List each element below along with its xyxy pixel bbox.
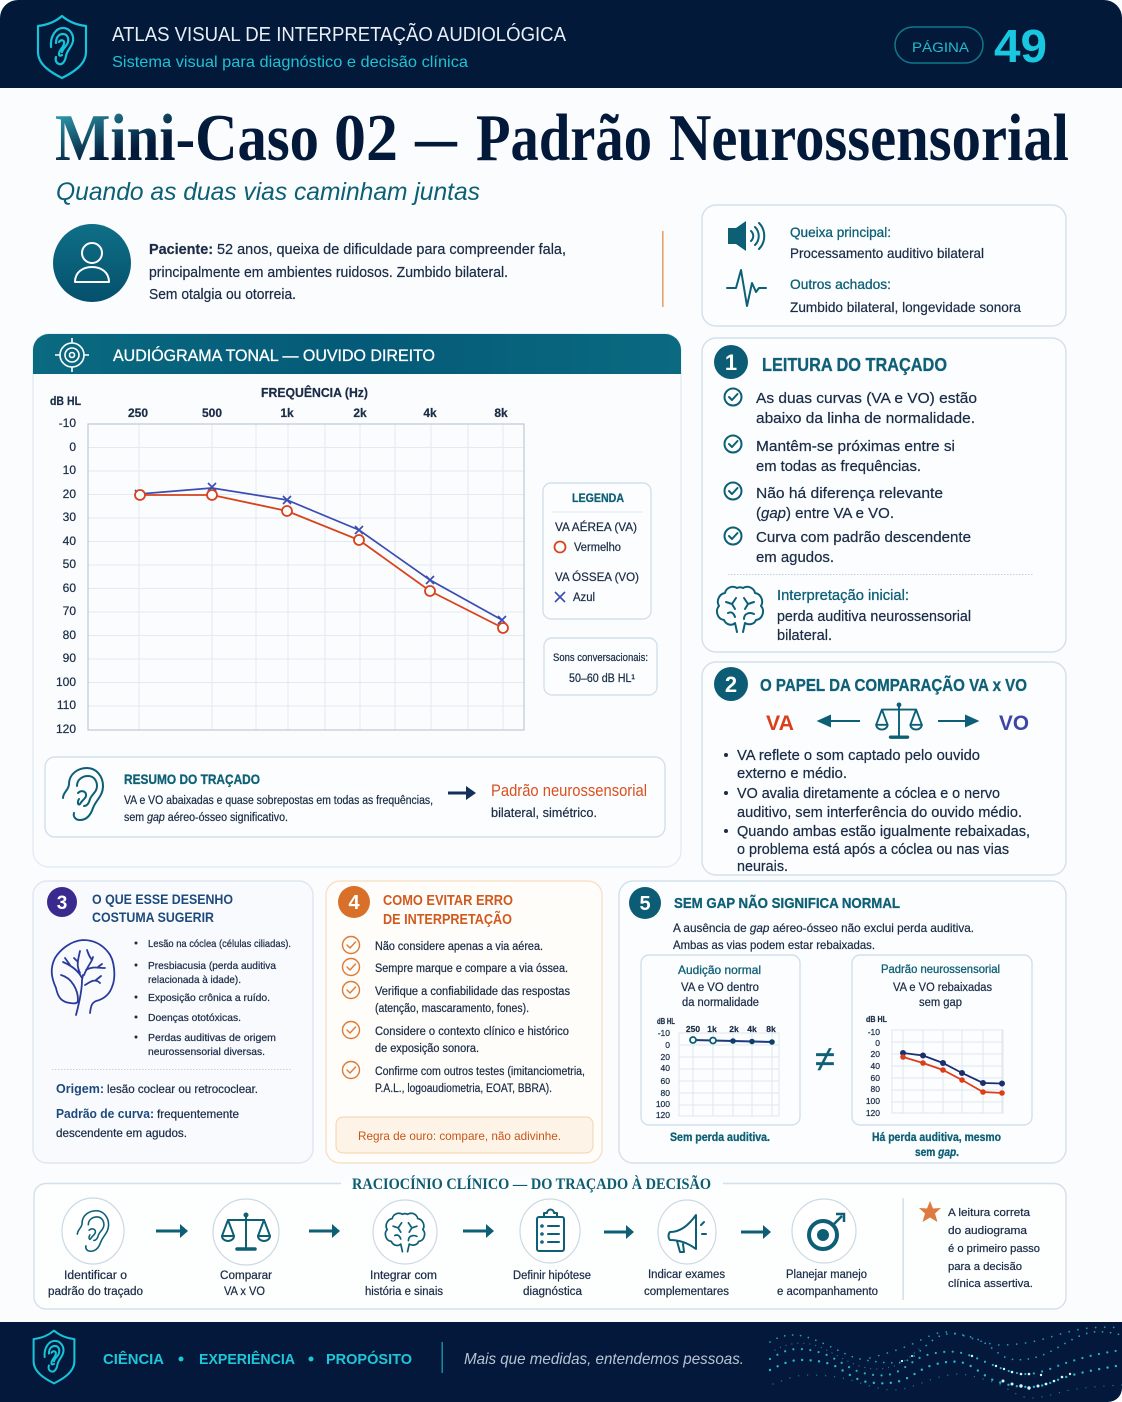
badge 5: 5 bbox=[639, 893, 651, 915]
heading: COSTUMA SUGERIR bbox=[92, 909, 214, 925]
legend: VA ÓSSEA (VO) bbox=[555, 569, 639, 584]
mini chart: sensorineural pattern: 120 bbox=[866, 1108, 880, 1118]
legend: LEGENDA bbox=[572, 491, 624, 505]
heading: COMO EVITAR ERRO bbox=[383, 893, 513, 909]
checklist bbox=[342, 936, 585, 1095]
step 2: Comparar bbox=[220, 1270, 272, 1282]
bright wave highlights bbox=[901, 1355, 1071, 1390]
checklist: abaixo da linha de normalidade. bbox=[756, 410, 975, 427]
icon: ear shield logo bbox=[38, 16, 86, 78]
callout: correct reading: do audiograma bbox=[948, 1225, 1028, 1237]
badge 2 bbox=[714, 667, 748, 701]
mini chart: sensorineural pattern: 80 bbox=[871, 1084, 880, 1094]
arrow bbox=[448, 786, 476, 800]
mini chart: normal hearing: -10 bbox=[658, 1028, 670, 1038]
badge 3: 3 bbox=[57, 893, 67, 914]
icon: star bbox=[919, 1201, 941, 1222]
bullets: VO avalia diretamente a cóclea e o nervo bbox=[737, 786, 1000, 802]
bullets: Lesão na cóclea (células ciliadas). bbox=[148, 938, 291, 950]
chart captions bbox=[670, 1132, 1001, 1159]
trace summary: sem gap aéreo-ósseo significativo. bbox=[124, 812, 288, 824]
VA to VO diagram: VA bbox=[766, 712, 794, 735]
badge 2: 2 bbox=[725, 672, 737, 697]
mini chart: normal hearing: 60 bbox=[661, 1076, 670, 1086]
step 3 bbox=[365, 1200, 443, 1298]
chart: audiogram: 250 bbox=[128, 406, 148, 420]
chart: audiogram: 60 bbox=[63, 581, 76, 595]
mini chart: sensorineural pattern: 20 bbox=[871, 1049, 880, 1059]
bullets: o problema está após a cóclea ou nas vias bbox=[737, 842, 1009, 858]
badge 3 bbox=[47, 887, 77, 917]
step 4: diagnóstica bbox=[523, 1286, 583, 1298]
bullets: Perdas auditivas de origem bbox=[148, 1032, 276, 1044]
step 1: Identificar o bbox=[64, 1270, 127, 1282]
footer values: CIÊNCIA bbox=[103, 1350, 164, 1368]
bullets: Quando ambas estão igualmente rebaixadas, bbox=[737, 824, 1030, 840]
title: — bbox=[414, 101, 458, 175]
chart captions: Sem perda auditiva. bbox=[670, 1132, 770, 1144]
step 6: e acompanhamento bbox=[777, 1286, 878, 1298]
complaint text: Zumbido bilateral, longevidade sonora bbox=[790, 299, 1021, 315]
VA to VO diagram bbox=[766, 703, 1029, 737]
mini chart: normal hearing: 2k bbox=[729, 1024, 739, 1034]
legend: Vermelho bbox=[574, 542, 621, 554]
dotted wave decoration bbox=[770, 1327, 1122, 1398]
initial interpretation: bilateral. bbox=[777, 628, 832, 644]
not equal sign: ≠ bbox=[815, 1038, 835, 1079]
panel 5: no gap does not mean normal bbox=[619, 881, 1066, 1163]
patient text: Sem otalgia ou otorreia. bbox=[149, 286, 296, 303]
complaint text bbox=[790, 224, 1021, 315]
bullets: VA reflete o som captado pelo ouvido bbox=[737, 748, 980, 764]
bullets bbox=[134, 938, 291, 1058]
icon: footer shield logo bbox=[34, 1331, 74, 1383]
series: bone conduction (blue) bbox=[135, 483, 506, 624]
mini chart: normal hearing: 8k bbox=[766, 1024, 776, 1034]
complaint text: Processamento auditivo bilateral bbox=[790, 245, 984, 261]
step 3: história e sinais bbox=[365, 1286, 443, 1298]
checklist: Curva com padrão descendente bbox=[756, 529, 971, 546]
bullets: relacionada à idade). bbox=[148, 974, 241, 986]
mini chart: normal hearing: 0 bbox=[665, 1040, 670, 1050]
bullets: externo e médio. bbox=[737, 766, 847, 782]
icon: brain tree bbox=[52, 940, 114, 1015]
checklist: Confirme com outros testes (imitanciometria, bbox=[375, 1066, 585, 1078]
mini chart: sensorineural pattern: Padrão neurossensorial bbox=[881, 962, 1000, 976]
heading: SEM GAP NÃO SIGNIFICA NORMAL bbox=[674, 894, 900, 912]
checklist: em todas as frequências. bbox=[756, 458, 921, 475]
mini chart: normal hearing: Audição normal bbox=[678, 963, 761, 977]
arrow head bbox=[180, 1224, 188, 1238]
origin and curve notes: lesão coclear ou retrococlear. bbox=[107, 1082, 258, 1096]
callout: correct reading: é o primeiro passo bbox=[948, 1243, 1040, 1255]
heading bbox=[383, 893, 513, 928]
mini chart: normal hearing: 1k bbox=[707, 1024, 717, 1034]
mini chart: sensorineural pattern: 40 bbox=[871, 1061, 880, 1071]
callout: conversational sounds bbox=[544, 638, 657, 695]
step 5: Indicar exames bbox=[648, 1269, 725, 1281]
patient text: Paciente: bbox=[149, 241, 213, 258]
origin and curve notes: Padrão de curva: bbox=[56, 1106, 154, 1121]
bullets: auditivo, sem interferência do ouvido médio. bbox=[737, 805, 1022, 821]
chart: audiogram: 80 bbox=[63, 628, 76, 642]
checklist: Sempre marque e compare a via óssea. bbox=[375, 963, 568, 975]
chart: audiogram: 40 bbox=[63, 534, 76, 548]
complaint text: Outros achados: bbox=[790, 276, 891, 292]
mini chart: sensorineural pattern: 0 bbox=[875, 1038, 880, 1048]
patient text bbox=[149, 241, 566, 303]
intro text: Ambas as vias podem estar rebaixadas. bbox=[673, 938, 875, 952]
step 5 bbox=[644, 1200, 729, 1298]
checklist: P.A.L., logoaudiometria, EOAT, BBRA). bbox=[375, 1083, 552, 1095]
intro text bbox=[673, 921, 974, 952]
bullets: neurossensorial diversas. bbox=[148, 1046, 265, 1058]
chart: audiogram: 20 bbox=[63, 487, 76, 501]
chart: audiogram: 120 bbox=[56, 722, 76, 736]
callout: correct reading: A leitura correta bbox=[948, 1207, 1031, 1219]
bullets: Exposição crônica a ruído. bbox=[148, 992, 270, 1004]
title: Mini-Caso bbox=[55, 101, 319, 175]
panel: clinical reasoning flow bbox=[34, 1174, 1066, 1309]
badge 4: 4 bbox=[348, 892, 360, 914]
trace summary bbox=[45, 757, 665, 837]
chart: audiogram: 100 bbox=[56, 675, 76, 689]
badge 5 bbox=[629, 887, 661, 919]
chart: audiogram: 110 bbox=[57, 698, 76, 712]
footer tagline: Mais que medidas, entendemos pessoas. bbox=[464, 1351, 744, 1368]
title: Neurossensorial bbox=[669, 101, 1069, 175]
golden rule callout: Regra de ouro: compare, não adivinhe. bbox=[358, 1129, 561, 1143]
mini chart: normal hearing: da normalidade bbox=[682, 997, 759, 1009]
header bar bbox=[0, 0, 1122, 88]
flow heading: RACIOCÍNIO CLÍNICO — DO TRAÇADO À DECISÃO bbox=[352, 1174, 711, 1193]
callout: conversational sounds: Sons conversacionais: bbox=[553, 652, 648, 664]
callout: conversational sounds: 50–60 dB HL¹ bbox=[569, 673, 635, 685]
bullets: Presbiacusia (perda auditiva bbox=[148, 960, 276, 972]
header subtitle: Sistema visual para diagnóstico e decisão clínica bbox=[112, 54, 468, 71]
mini chart: normal hearing: 20 bbox=[661, 1052, 670, 1062]
icon: target spiral bbox=[55, 338, 89, 372]
arrow head bbox=[763, 1225, 771, 1239]
chart: audiogram: FREQUÊNCIA (Hz) bbox=[261, 385, 368, 400]
step 1: padrão do traçado bbox=[48, 1286, 143, 1298]
complaint text: Queixa principal: bbox=[790, 224, 891, 240]
initial interpretation: Interpretação inicial: bbox=[777, 588, 909, 604]
trace summary: bilateral, simétrico. bbox=[491, 805, 597, 820]
audiogram title: AUDIÓGRAMA TONAL — OUVIDO DIREITO bbox=[113, 346, 435, 365]
initial interpretation: perda auditiva neurossensorial bbox=[777, 609, 971, 625]
checklist bbox=[724, 388, 977, 566]
chart: audiogram: 90 bbox=[63, 651, 76, 665]
mini chart: normal hearing: 40 bbox=[661, 1063, 670, 1073]
footer values: EXPERIÊNCIA bbox=[199, 1350, 295, 1368]
chart: audiogram: 500 bbox=[202, 406, 222, 420]
mini chart: sensorineural pattern: sem gap bbox=[919, 997, 962, 1009]
patient block bbox=[53, 224, 566, 303]
checklist: em agudos. bbox=[756, 549, 834, 566]
chart: audiogram: 2k bbox=[353, 406, 367, 420]
heading: O PAPEL DA COMPARAÇÃO VA x VO bbox=[760, 674, 1027, 695]
trace summary: VA e VO abaixadas e quase sobrepostas em todas as frequências, bbox=[124, 795, 433, 807]
step 2: VA x VO bbox=[224, 1286, 265, 1298]
mini chart: normal hearing: 4k bbox=[747, 1024, 757, 1034]
legend: VA AÉREA (VA) bbox=[555, 519, 637, 534]
trace summary: RESUMO DO TRAÇADO bbox=[124, 771, 260, 787]
legend: Azul bbox=[573, 592, 595, 604]
subtitle: Quando as duas vias caminham juntas bbox=[56, 178, 480, 206]
origin and curve notes: descendente em agudos. bbox=[56, 1126, 187, 1140]
step 5: complementares bbox=[644, 1286, 729, 1298]
checklist: Não há diferença relevante bbox=[756, 485, 943, 502]
mini chart: normal hearing: 80 bbox=[661, 1088, 670, 1098]
panel: audiogram bbox=[33, 334, 681, 867]
chart: audiogram: 50 bbox=[63, 557, 76, 571]
mini chart: sensorineural pattern: -10 bbox=[868, 1027, 880, 1037]
icon: patient avatar bbox=[53, 224, 131, 302]
page number: 49 bbox=[994, 20, 1047, 72]
chart: audiogram: -10 bbox=[59, 416, 76, 430]
series: air conduction (red) bbox=[135, 490, 508, 633]
golden rule callout bbox=[336, 1117, 593, 1153]
step 6: Planejar manejo bbox=[786, 1269, 867, 1281]
chart: audiogram: 8k bbox=[494, 406, 508, 420]
heading: O QUE ESSE DESENHO bbox=[92, 891, 233, 907]
chart: audiogram: 30 bbox=[63, 510, 76, 524]
arrow head bbox=[486, 1224, 494, 1238]
arrow head bbox=[626, 1225, 634, 1239]
icon: ear bbox=[63, 768, 103, 820]
title: Padrão bbox=[476, 101, 652, 175]
chart: audiogram: dB HL bbox=[50, 394, 81, 408]
mini chart: normal hearing: 250 bbox=[686, 1024, 700, 1034]
callout: correct reading: clínica assertiva. bbox=[948, 1278, 1033, 1290]
panel 1: reading the trace bbox=[702, 338, 1066, 652]
title: 02 bbox=[334, 101, 398, 175]
icon: speaker bbox=[728, 221, 764, 251]
step 4 bbox=[513, 1199, 591, 1298]
panel: complaint bbox=[702, 205, 1066, 326]
chart: audiogram: 0 bbox=[69, 440, 76, 454]
badge 1 bbox=[714, 345, 748, 379]
badge 1: 1 bbox=[725, 350, 737, 375]
origin and curve notes: Origem: bbox=[56, 1081, 104, 1096]
patient text: principalmente em ambientes ruidosos. Zumbido bilateral. bbox=[149, 264, 508, 281]
badge 4 bbox=[338, 886, 370, 918]
callout: correct reading bbox=[919, 1201, 1040, 1290]
chart captions: Há perda auditiva, mesmo bbox=[872, 1132, 1001, 1144]
chart: audiogram: 70 bbox=[63, 604, 76, 618]
panel 3: what the pattern suggests bbox=[33, 881, 313, 1163]
mini chart: sensorineural pattern: 100 bbox=[866, 1096, 880, 1106]
mini chart: sensorineural pattern: dB HL bbox=[866, 1015, 887, 1024]
mini chart: normal hearing bbox=[641, 955, 800, 1125]
legend bbox=[543, 483, 651, 619]
patient text: 52 anos, queixa de dificuldade para compreender fala, bbox=[217, 241, 566, 258]
trace summary: Padrão neurossensorial bbox=[491, 781, 647, 800]
chart: audiogram bbox=[50, 385, 524, 736]
callout: correct reading: para a decisão bbox=[948, 1261, 1022, 1273]
chart: audiogram: 10 bbox=[63, 463, 76, 477]
arrow head bbox=[332, 1224, 340, 1238]
step 6 bbox=[777, 1199, 878, 1298]
footer values bbox=[103, 1350, 412, 1368]
initial interpretation bbox=[777, 588, 971, 644]
checklist: Mantêm-se próximas entre si bbox=[756, 438, 955, 455]
checklist: (atenção, mascaramento, fones). bbox=[375, 1003, 529, 1015]
step 2 bbox=[213, 1199, 279, 1298]
audiogram header bbox=[33, 334, 681, 374]
heading: DE INTERPRETAÇÃO bbox=[383, 910, 512, 928]
VA to VO diagram: VO bbox=[999, 712, 1029, 735]
chart: audiogram: 1k bbox=[280, 406, 294, 420]
intro text: A ausência de gap aéreo-ósseo não exclui perda auditiva. bbox=[673, 921, 974, 935]
step 4: Definir hipótese bbox=[513, 1270, 591, 1282]
step 3: Integrar com bbox=[370, 1270, 437, 1282]
mini chart: normal hearing: VA e VO dentro bbox=[681, 982, 759, 994]
bullets: neurais. bbox=[737, 859, 788, 875]
icon: pulse bbox=[727, 270, 766, 306]
page pill bbox=[895, 27, 983, 63]
checklist: Verifique a confiabilidade das respostas bbox=[375, 986, 570, 998]
panel 4: avoiding errors bbox=[326, 881, 602, 1163]
mini chart: normal hearing: 120 bbox=[656, 1110, 670, 1120]
mini chart: normal hearing: 100 bbox=[656, 1099, 670, 1109]
chart: audiogram: 4k bbox=[423, 406, 437, 420]
header title: ATLAS VISUAL DE INTERPRETAÇÃO AUDIOLÓGICA bbox=[112, 22, 567, 46]
mini chart: sensorineural pattern: VA e VO rebaixadas bbox=[893, 982, 992, 994]
step 1 bbox=[48, 1198, 143, 1298]
checklist: As duas curvas (VA e VO) estão bbox=[756, 390, 977, 407]
heading: LEITURA DO TRAÇADO bbox=[762, 355, 947, 375]
mini chart: normal hearing: dB HL bbox=[657, 1017, 675, 1026]
page pill: PÁGINA bbox=[912, 39, 970, 55]
mini chart: sensorineural pattern: 60 bbox=[871, 1073, 880, 1083]
title bbox=[55, 101, 1069, 175]
panel 2: VA x VO comparison bbox=[702, 662, 1066, 875]
footer values: PROPÓSITO bbox=[326, 1350, 412, 1368]
icon: brain bbox=[717, 587, 763, 632]
bullets: Doenças ototóxicas. bbox=[148, 1012, 241, 1024]
heading bbox=[92, 891, 233, 925]
mini chart: sensorineural pattern bbox=[852, 955, 1032, 1125]
origin and curve notes bbox=[56, 1081, 258, 1140]
checklist: de exposição sonora. bbox=[375, 1043, 479, 1055]
bullets bbox=[724, 748, 1030, 875]
checklist: Considere o contexto clínico e histórico bbox=[375, 1026, 569, 1038]
footer bar bbox=[0, 1322, 1122, 1402]
origin and curve notes: frequentemente bbox=[157, 1107, 239, 1121]
chart captions: sem gap. bbox=[915, 1147, 959, 1159]
checklist: Não considere apenas a via aérea. bbox=[375, 941, 543, 953]
checklist: (gap) entre VA e VO. bbox=[756, 505, 894, 522]
